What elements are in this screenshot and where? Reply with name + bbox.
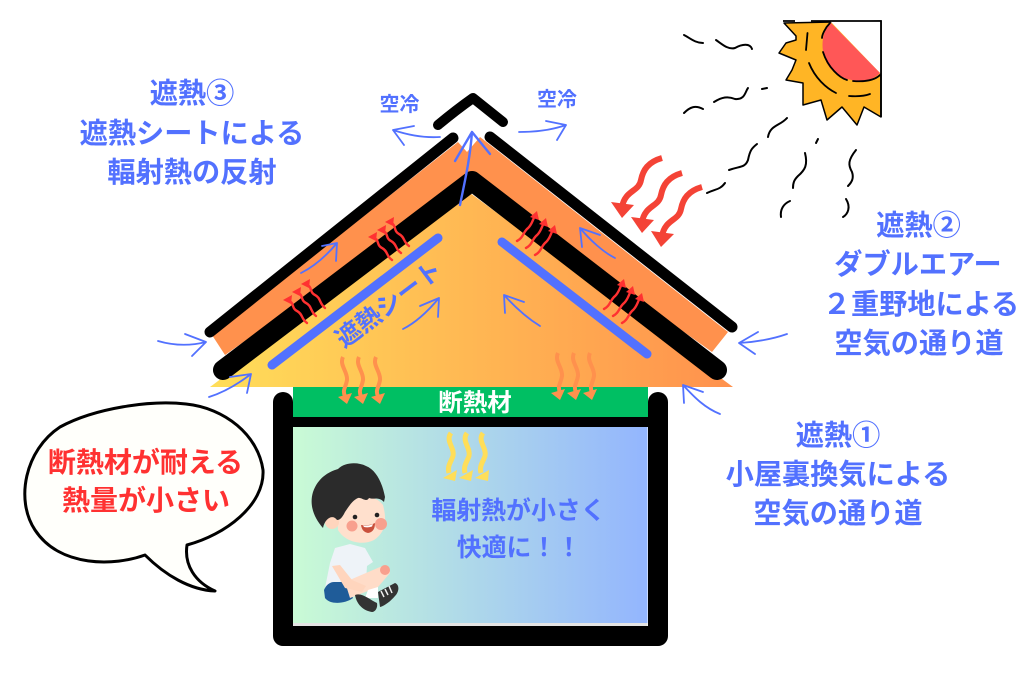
- insulation band: [293, 387, 648, 417]
- head: [337, 496, 385, 543]
- icon: sun heat squiggles: [684, 35, 856, 217]
- text block: heat shield 1: 遮熱①: [796, 419, 880, 451]
- white sock: [365, 587, 378, 598]
- label: insulation: 断熱材: [438, 389, 512, 417]
- room floor line: [293, 623, 648, 626]
- text block: heat shield 2: ダブルエアー: [834, 248, 1002, 280]
- cheeks: [346, 520, 358, 532]
- ceiling: [293, 417, 648, 427]
- text block: heat shield 2: 空気の通り道: [834, 327, 1004, 359]
- text block: heat shield 1: 小屋裏換気による: [726, 458, 950, 490]
- mouth: [361, 523, 375, 533]
- shoes: [355, 594, 377, 612]
- icon: red heat arrows hitting roof: [611, 158, 702, 247]
- text block: heat shield 3: 輻射熱の反射: [107, 156, 277, 188]
- label: comfortable room line 2: 快適に！！: [457, 534, 581, 562]
- heat sheet left: [272, 238, 438, 365]
- knee: [380, 565, 390, 575]
- blue airflow arrows: [158, 121, 787, 414]
- label: comfortable room: 輻射熱が小さく: [431, 496, 606, 525]
- illustration: sitting child: [312, 463, 398, 612]
- heat sheet right: [502, 242, 647, 354]
- roof air layer: [212, 137, 728, 355]
- bubble text line 2: 熱量が小さい: [62, 484, 230, 516]
- shorts: [324, 582, 353, 603]
- yellow heat arrows in room: [443, 433, 489, 481]
- text block: heat shield 3: [80, 77, 304, 188]
- label: heat shield sheet: 遮熱シート: [331, 256, 448, 353]
- arm and leg: [345, 566, 390, 598]
- orange heat arrows through insulation: [338, 353, 597, 404]
- hair: [312, 463, 385, 528]
- house walls: [283, 402, 658, 636]
- roof upper deck right: [490, 137, 732, 327]
- ear: [325, 515, 339, 529]
- text block: heat shield 2: [823, 209, 1019, 359]
- room interior: [293, 427, 648, 623]
- text block: heat shield 3: 遮熱シートによる: [80, 117, 304, 149]
- roof lower deck: [223, 181, 717, 370]
- label: cooling air right: 空冷: [537, 88, 577, 111]
- text block: heat shield 1: 空気の通り道: [753, 497, 923, 529]
- bubble text line 1: 断熱材が耐える: [48, 446, 243, 478]
- label: cooling air left: 空冷: [380, 93, 420, 116]
- text block: heat shield 3: 遮熱③: [150, 77, 234, 109]
- ridge cap: [438, 98, 503, 125]
- small red arrows on lower roof deck: [283, 211, 644, 323]
- attic triangle: [210, 193, 733, 387]
- roof upper deck left: [210, 138, 453, 332]
- speech bubble: [25, 403, 263, 591]
- icon: sun: [779, 21, 881, 125]
- text block: heat shield 2: 遮熱②: [876, 209, 961, 241]
- eyes: [353, 515, 357, 519]
- text block: heat shield 1: [726, 419, 950, 529]
- shirt: [325, 544, 373, 590]
- text block: heat shield 2: ２重野地による: [823, 288, 1019, 320]
